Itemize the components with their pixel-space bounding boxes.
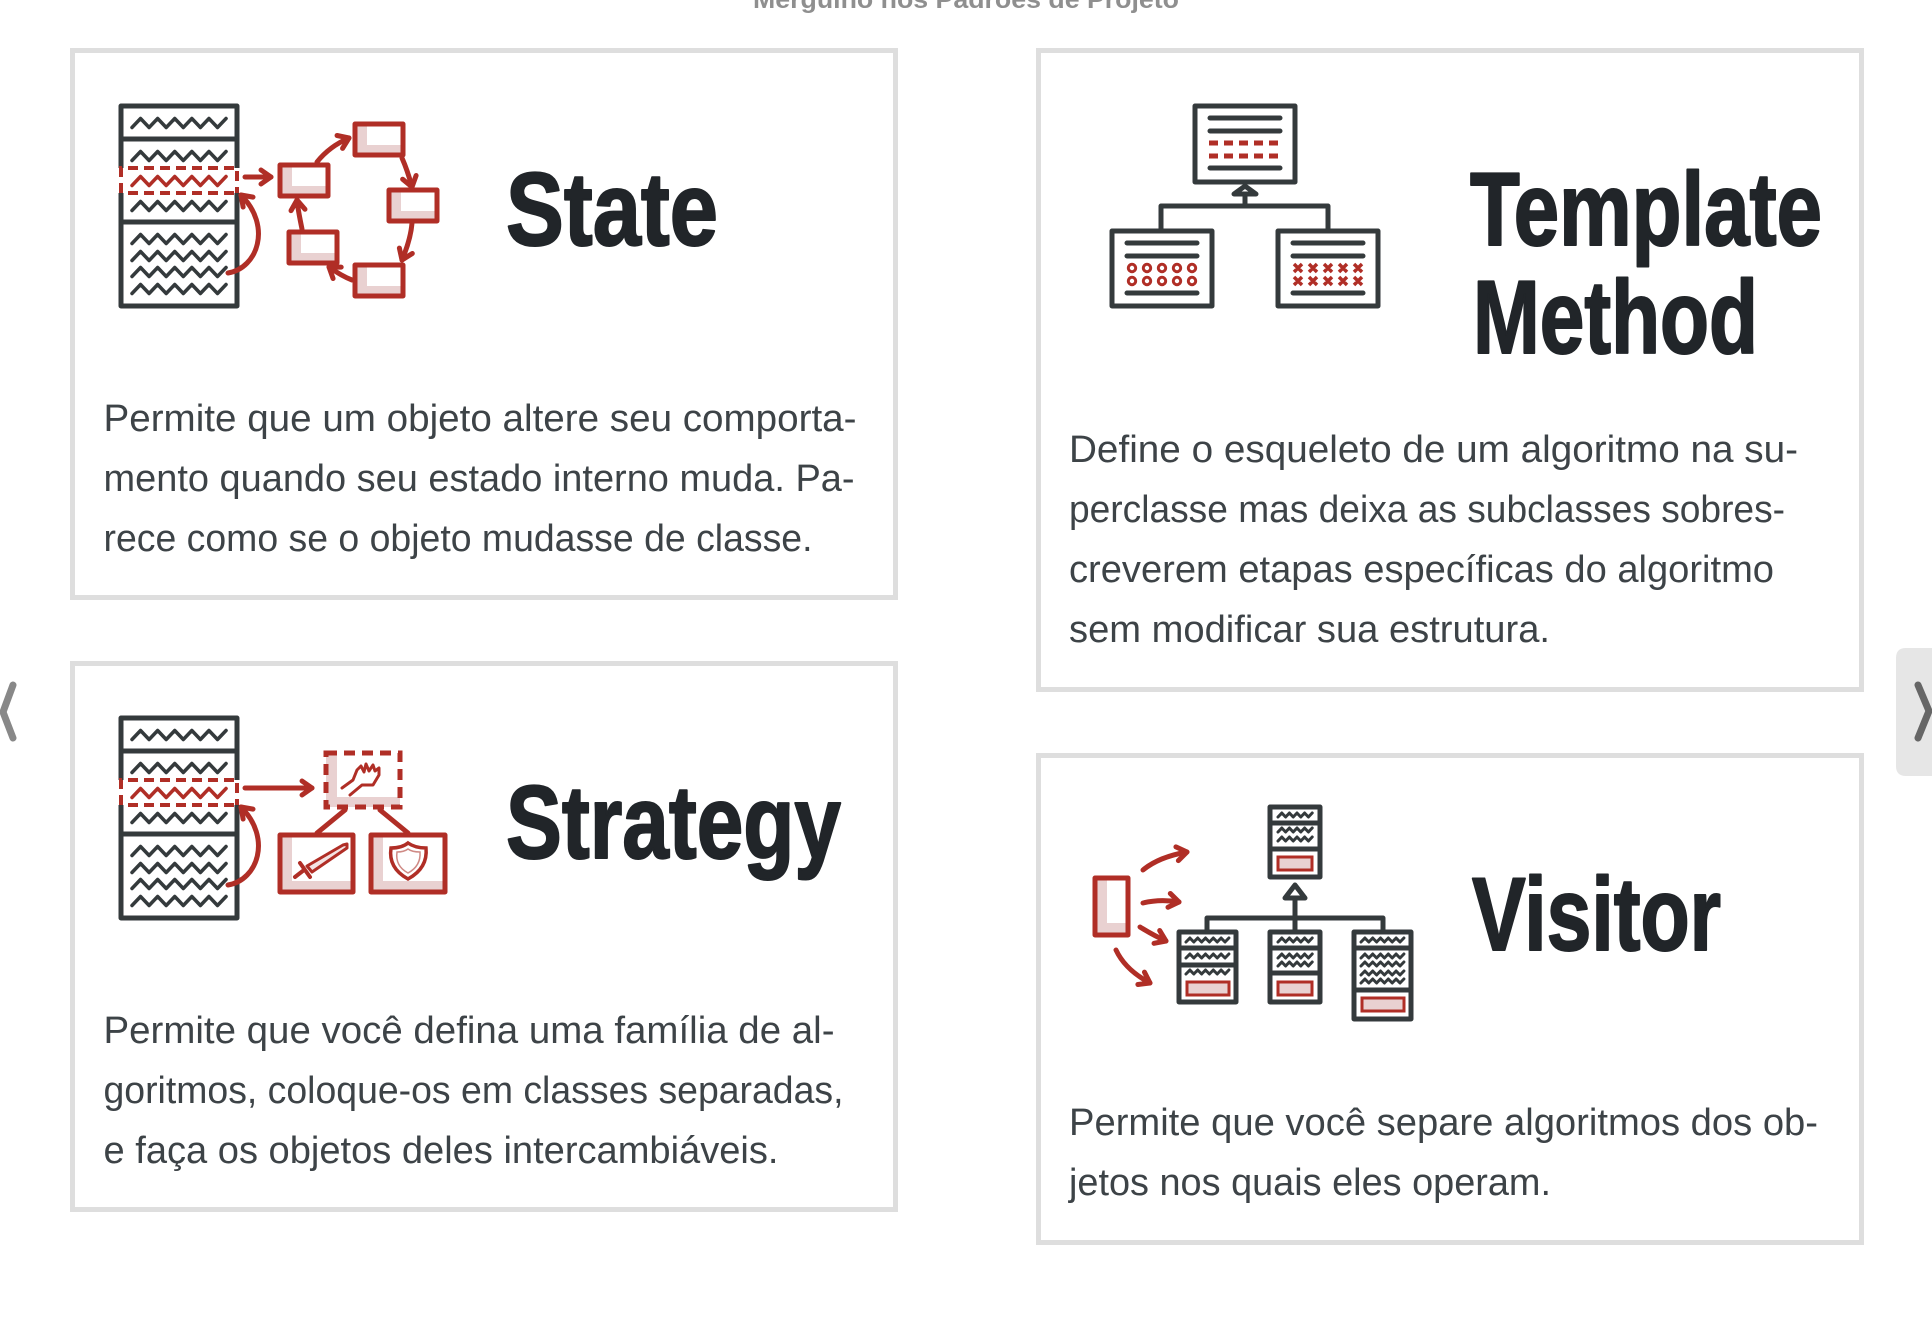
title: Visitor: Visitor: [1472, 857, 1721, 973]
text: State description: Permite que um objeto altere seu comporta-: [104, 398, 856, 440]
icon: Visitor diagram: [1095, 807, 1411, 1019]
text: Strategy description: goritmos, coloque-os em classes separadas,: [104, 1070, 844, 1112]
text: Visitor description: jetos nos quais eles operam.: [1068, 1162, 1551, 1204]
text: Strategy description: e faça os objetos deles intercambiáveis.: [104, 1130, 778, 1172]
text: Template Method description: sem modificar sua estrutura.: [1069, 609, 1550, 651]
icon: Template Method diagram: [1112, 106, 1378, 306]
text: State description: [104, 398, 856, 560]
text: Visitor description: Permite que você separe algoritmos dos ob-: [1069, 1102, 1818, 1144]
title: Template Method: Method: [1473, 260, 1758, 376]
arrow: previous slide: [3, 685, 13, 738]
text: State description: mento quando seu estado interno muda. Pa-: [104, 458, 854, 500]
text: Template Method description: perclasse mas deixa as subclasses sobres-: [1069, 489, 1785, 531]
text: Strategy description: Permite que você defina uma família de al-: [104, 1010, 834, 1052]
text: State description: rece como se o objeto mudasse de classe.: [104, 518, 812, 560]
text: Template Method description: creverem etapas específicas do algoritmo: [1069, 549, 1774, 591]
icon: State pattern diagram: [118, 106, 437, 306]
title: Template Method: [1470, 152, 1822, 376]
panel: Visitor: [1038, 756, 1862, 1242]
panel: State: [72, 50, 896, 598]
panel: Strategy: [72, 664, 896, 1210]
title: Template Method: Template: [1470, 152, 1822, 268]
text: Strategy description: [104, 1010, 844, 1172]
panel: Template Method: [1038, 50, 1862, 690]
arrow: next slide button: [1896, 648, 1932, 776]
title: State: State: [506, 152, 718, 268]
title: Strategy: Strategy: [506, 765, 841, 881]
text: Template Method description: Define o esqueleto de um algoritmo na su-: [1069, 429, 1798, 471]
text: Visitor description: [1068, 1102, 1818, 1204]
text: Template Method description: [1069, 429, 1798, 651]
icon: Strategy pattern diagram: [118, 718, 445, 918]
